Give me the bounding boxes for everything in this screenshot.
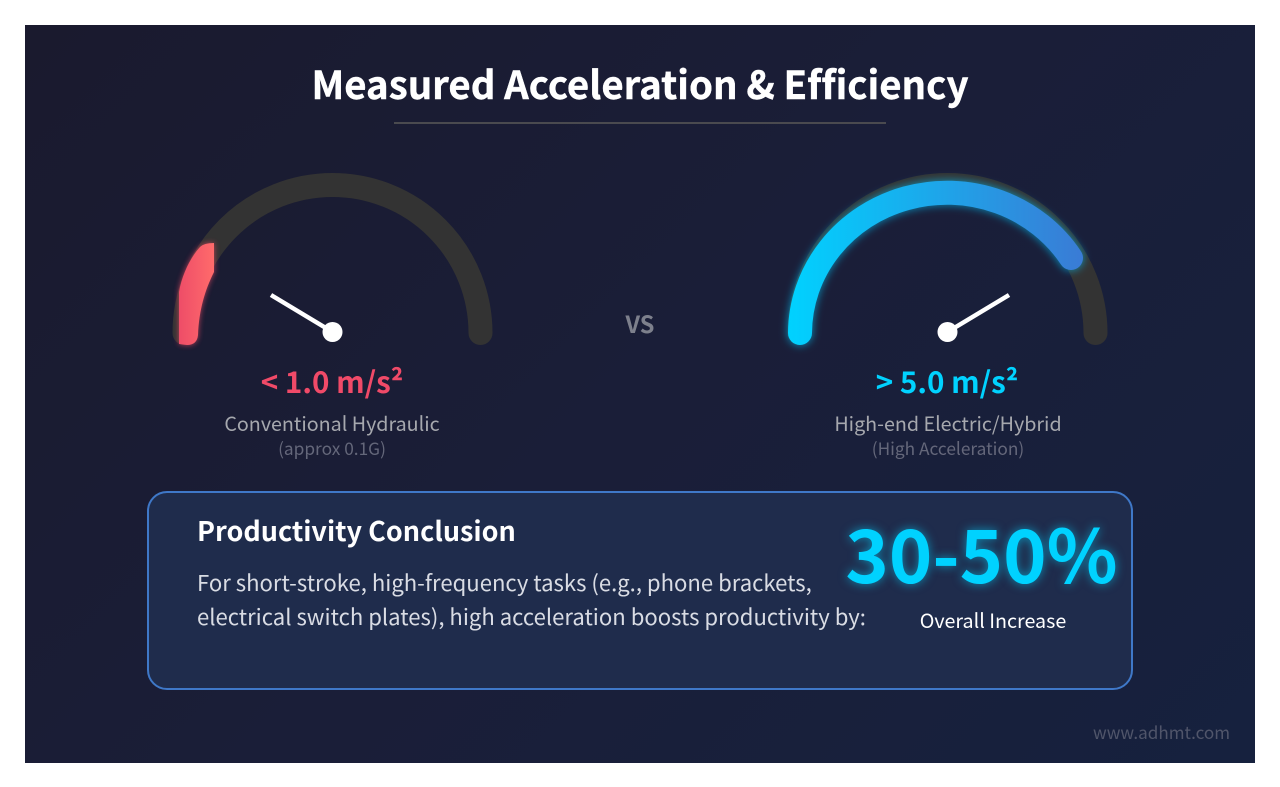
title: Measured Acceleration & Efficiency — [311, 55, 969, 111]
right label: High-end Electric/Hybrid — [834, 408, 1062, 437]
conclusion body: electrical switch plates), high acceleration boosts productivity by: — [197, 600, 866, 632]
left gauge track — [184, 185, 480, 333]
conclusion body: For short-stroke, high-frequency tasks (e.g., phone brackets, — [197, 566, 812, 598]
right gauge needle — [938, 295, 1009, 342]
left gauge: conventional hydraulic — [179, 185, 480, 345]
left sublabel: (approx 0.1G) — [278, 435, 386, 460]
title underline — [394, 122, 886, 124]
left gauge red value arc — [179, 243, 214, 345]
right gauge blue value arc — [800, 193, 1071, 333]
left value: < 1.0 m/s² — [261, 359, 403, 402]
conclusion heading: Productivity Conclusion — [197, 510, 516, 549]
conclusion body — [197, 566, 866, 632]
right sublabel: (High Acceleration) — [872, 435, 1024, 460]
big percentage: 30-50% — [845, 499, 1118, 605]
right gauge: electric hybrid — [800, 185, 1096, 342]
left gauge needle — [271, 295, 342, 342]
panel: productivity conclusion — [147, 491, 1133, 690]
right value: > 5.0 m/s² — [876, 359, 1018, 402]
left gauge red glow — [179, 243, 214, 345]
percentage caption: Overall Increase — [920, 605, 1066, 634]
right gauge blue glow — [800, 193, 1071, 333]
left label: Conventional Hydraulic — [224, 408, 440, 437]
right gauge track — [800, 185, 1096, 333]
vs label: VS — [626, 306, 654, 340]
watermark: www.adhmt.com — [1093, 719, 1230, 744]
